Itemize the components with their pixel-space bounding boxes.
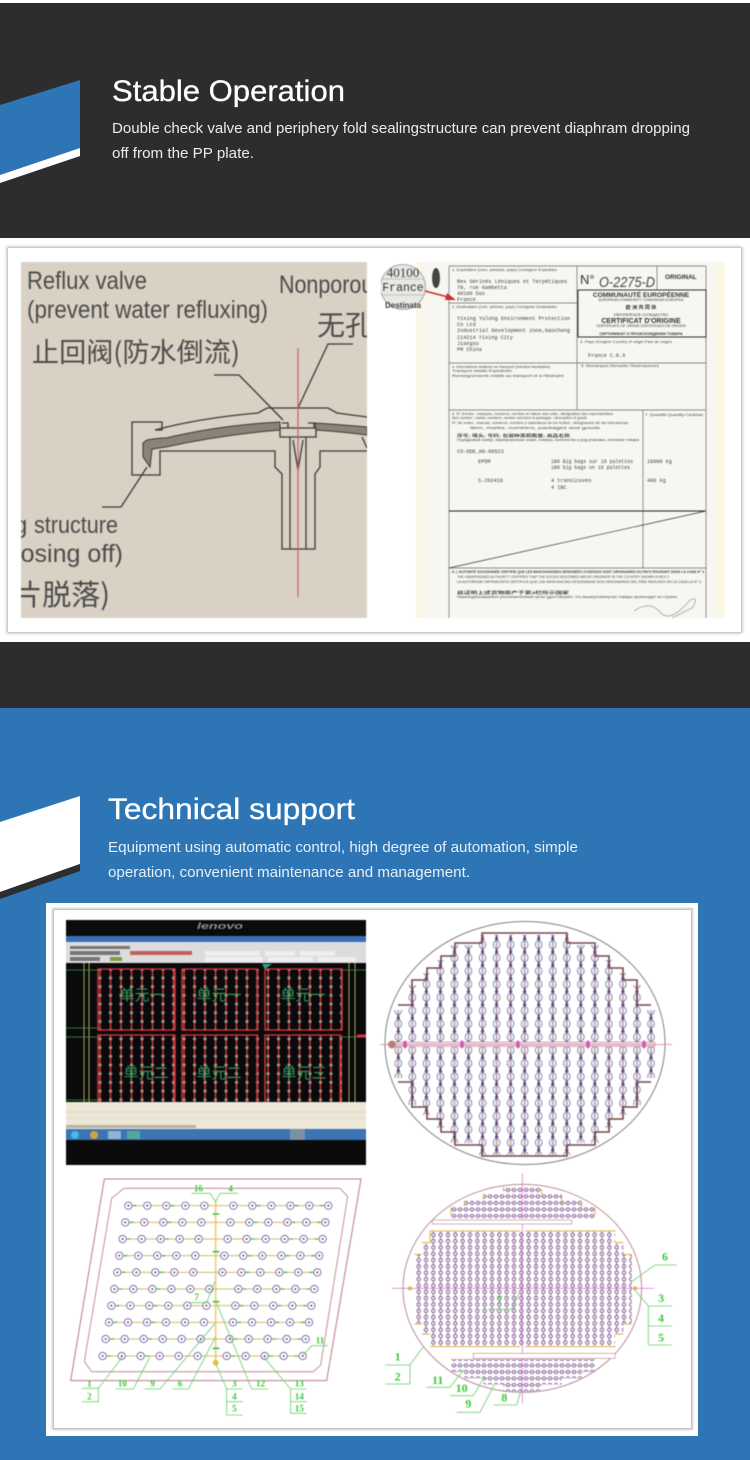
image: certificate of origin document: CERTIFICAT D'ORIGINE [601, 318, 681, 325]
image: CAD screen photo: 单元二 [123, 1062, 169, 1083]
image: certificate of origin document: France [382, 282, 424, 295]
panel: valve and certificate photos [8, 248, 741, 632]
image: certificate of origin document: 欧 洲 共 同 体 [626, 304, 656, 311]
image: certificate of origin document: EPDM [478, 459, 490, 465]
image: reflux valve cross-section diagram [20, 262, 368, 618]
image: CAD screen photo [65, 919, 367, 1166]
image: certificate of origin document: 18000 kg [647, 459, 672, 465]
section: dark spacer band [0, 642, 750, 708]
image: circular plate with rows and callouts: 11 [432, 1373, 443, 1387]
image: certificate of origin document: Destinata [385, 301, 422, 310]
text block: stable operation description: off from the PP plate. [112, 145, 254, 162]
image: certificate of origin document: Industrial Development zone,Gaocheng [457, 328, 570, 334]
image: certificate of origin document: N° de orden ; marcas, números, nombre y naturaleza de los bultos ; designación de las mercancías [452, 421, 628, 425]
image: circular plate with rows and callouts [384, 1172, 678, 1414]
image: CAD screen photo: 单元二 [196, 1062, 242, 1083]
image: certificate of origin document: PR China [457, 347, 482, 353]
image: certificate of origin document [380, 262, 725, 618]
image: rectangular plate pipe layout with callouts: 3 [232, 1379, 237, 1389]
image: certificate of origin document: Порядковый номер, маркировочные знаки, номера, количество и род упаковки, описание товара [457, 438, 639, 442]
image: certificate of origin document: 1. Expéditeur (nom, adresse, pays) Consignor Expedidor [452, 268, 558, 272]
image: certificate of origin document: Transport details Expedición [452, 369, 512, 373]
image: reflux valve cross-section diagram: structure [34, 512, 118, 539]
image: rectangular plate pipe layout with callouts [70, 1178, 362, 1416]
icon: white slanted banner [0, 796, 80, 899]
image: certificate of origin document: EUROPEAN COMMUNITY COMUNIDAD EUROPEA [598, 298, 684, 302]
image: certificate of origin document: 4 transicuves [551, 478, 591, 484]
image: certificate of origin document: item, marks, numbers, packages and goods [470, 426, 600, 430]
image: rectangular plate pipe layout with callouts: 6 [178, 1379, 183, 1389]
panel frame [53, 909, 692, 1429]
image: certificate of origin document: THE UNDERSIGNED AUTHORITY CERTIFIES THAT THE GOODS DESCRIBED ABOVE ORIGINATE IN THE COUNTRY SHOWN IN BOX 3 [457, 575, 669, 579]
image: certificate of origin document: Нижеподписавшийся уполномоченный орган удостоверяет, что вышеупомянутые товары происходят из страны [457, 595, 678, 599]
image: certificate of origin document: Renseignements relatifs au transport et à l'itinéraire [452, 374, 564, 378]
image: certificate of origin document: 兹证明上述货物原产于第3栏所示国家 [457, 589, 569, 595]
icon: blue slanted banner [0, 80, 80, 183]
image: rectangular plate pipe layout with callouts: 1 [87, 1379, 92, 1389]
text block: stable operation description: Double check valve and periphery fold sealingstructure can prevent diaphram dropping [112, 120, 690, 137]
heading: Technical support: Technical support [108, 793, 356, 826]
image: certificate of origin document: Co Ltd [457, 322, 476, 328]
image: certificate of origin document: 5. Remarques Remarks Observaciones [581, 364, 659, 368]
text block: technical support description: Equipment using automatic control, high degree of automation, simple [108, 839, 578, 856]
image: reflux valve cross-section diagram: Reflux valve [27, 267, 147, 295]
heading: Stable Operation: Stable Operation [112, 75, 345, 108]
image: circular plate with rows and callouts: 8 [501, 1390, 507, 1404]
image: certificate of origin document: France C.K.X [588, 353, 626, 359]
image: certificate of origin document: CERTIFICATE OF ORIGIN CERTIFICADO DE ORIGEN [596, 324, 686, 328]
image: reflux valve cross-section diagram: (prevent water refluxing) [27, 296, 268, 324]
image: certificate of origin document: 214214 Yixing City [457, 335, 513, 341]
image: certificate of origin document: France [457, 297, 476, 303]
image: certificate of origin document: COMMUNAUTÉ EUROPÉENNE [593, 290, 690, 299]
image: certificate of origin document: 40100 Dax [457, 291, 485, 297]
image: rectangular plate pipe layout with callouts: 7 [194, 1292, 199, 1302]
image: circular plate with rows and callouts: 6 [662, 1250, 668, 1264]
image: CAD screen photo: 单元一 [280, 984, 326, 1005]
image: CAD screen photo: 单元一 [119, 984, 165, 1005]
image: reflux valve cross-section diagram: 止回阀(防水倒流) [32, 331, 240, 370]
section: stable operation dark band [0, 3, 750, 238]
image: rectangular plate pipe layout with callouts: 15 [295, 1404, 304, 1414]
image: certificate of origin document: 7. Quantité Quantity Cantidad [645, 413, 703, 417]
image: certificate of origin document: 180 Big bags sur 18 palettes [551, 459, 633, 465]
image: circular plate with rows and callouts: 1 [395, 1350, 401, 1364]
image: rectangular plate pipe layout with callouts: 4 [232, 1391, 237, 1401]
image: certificate of origin document: ЕВРОПЕЙСКОЕ СООБЩЕСТВО [614, 313, 668, 317]
image: certificate of origin document: 序号; 唛头; 号码; 包装种类和数量; 商品名称 [457, 432, 570, 438]
image: certificate of origin document: 4. Informations relatives au transport (mention facultative) [452, 365, 550, 369]
image: certificate of origin document: 6. N° d'ordre ; marques, numéros, nombre et nature des colis ; désignation des marchandises [452, 412, 613, 416]
image: certificate of origin document: 4 IBC [551, 485, 567, 491]
image: CAD screen photo: lenovo [197, 921, 243, 932]
image: certificate of origin document: ORIGINAL [665, 274, 697, 281]
image: circular plate with rows and callouts: 5 [658, 1330, 664, 1344]
section: technical support blue band [0, 708, 750, 1460]
image: rectangular plate pipe layout with callouts: 4 [228, 1184, 233, 1194]
image: circular plate with rows and callouts: 7 [496, 1293, 502, 1307]
image: certificate of origin document: 40100 [387, 265, 419, 280]
image: certificate of origin document: 70, rue Gambetta [457, 285, 507, 291]
image: certificate of origin document: O-2275-D [599, 274, 655, 291]
image: circular plate pipe layout [380, 920, 672, 1166]
image: rectangular plate pipe layout with callouts: 10 [118, 1379, 127, 1389]
image: certificate of origin document: 180 big bags on 18 palettes [551, 465, 630, 471]
image: circular plate with rows and callouts: 3 [658, 1291, 664, 1305]
image: rectangular plate pipe layout with callouts: 5 [232, 1404, 237, 1414]
image: circular plate with rows and callouts: 10 [456, 1381, 468, 1395]
image: certificate of origin document: S-202418 [478, 478, 503, 484]
image: certificate of origin document: Yixing Yulong Environment Protection [457, 316, 570, 322]
text block: technical support description [108, 839, 578, 881]
image: certificate of origin document: LA AUTORIDAD INFRASCRITA CERTIFICA QUE LAS MERCANCÍAS DESIGNADAS SON ORIGINARIAS DEL PAÍS INDICADO EN LA CASILLA N° 3 [457, 580, 701, 584]
image: rectangular plate pipe layout with callouts: 16 [194, 1184, 203, 1194]
image: circular plate with rows and callouts: 9 [465, 1396, 471, 1410]
image: circular plate with rows and callouts: 4 [658, 1311, 664, 1325]
image: rectangular plate pipe layout with callouts: 13 [295, 1379, 304, 1389]
image: rectangular plate pipe layout with callouts: 14 [295, 1391, 304, 1401]
image: certificate of origin document: Jiangsu [457, 341, 479, 347]
image: rectangular plate pipe layout with callouts: 2 [87, 1391, 92, 1401]
image: circular plate with rows and callouts: 2 [395, 1370, 401, 1384]
image: rectangular plate pipe layout with callouts: 9 [150, 1379, 155, 1389]
text block: stable operation description [112, 120, 690, 162]
text block: technical support description: operation, convenient maintenance and management. [108, 864, 470, 881]
panel: control drawings [46, 903, 698, 1436]
image: certificate of origin document: 400 kg [647, 478, 666, 484]
image: rectangular plate pipe layout with callouts: 12 [256, 1379, 266, 1389]
image: rectangular plate pipe layout with callouts: 11 [316, 1335, 325, 1345]
image: certificate of origin document: Rex Gérinés Léniques et Terpétiques [457, 279, 567, 285]
image: certificate of origin document: 8. L'AUTORITÉ SOUSSIGNÉE CERTIFIE QUE LES MARCHANDISES DÉSIGNÉES CI-DESSUS SONT ORIGINAIRES DU PAYS FIGURANT DANS LA CASE N° 3 [452, 569, 704, 574]
image: certificate of origin document: СЕРТИФИКАТ О ПРОИСХОЖДЕНИИ ТОВАРА [599, 332, 683, 336]
image: certificate of origin document: Item number ; marks, numbers, number and kind of packages ; description of goods [452, 416, 587, 420]
image: certificate of origin document: N° [580, 272, 595, 287]
image: certificate of origin document: CO-DDE_08-06523 [457, 449, 504, 455]
image: certificate of origin document: 3. Pays d'origine Country of origin País de origen [580, 340, 672, 344]
image: certificate of origin document: 2. Destinataire (nom, adresse, pays) Consignee Destinatario [452, 305, 557, 309]
image: CAD screen photo: 单元一 [196, 984, 242, 1005]
image: CAD screen photo: 单元三 [281, 1062, 327, 1083]
